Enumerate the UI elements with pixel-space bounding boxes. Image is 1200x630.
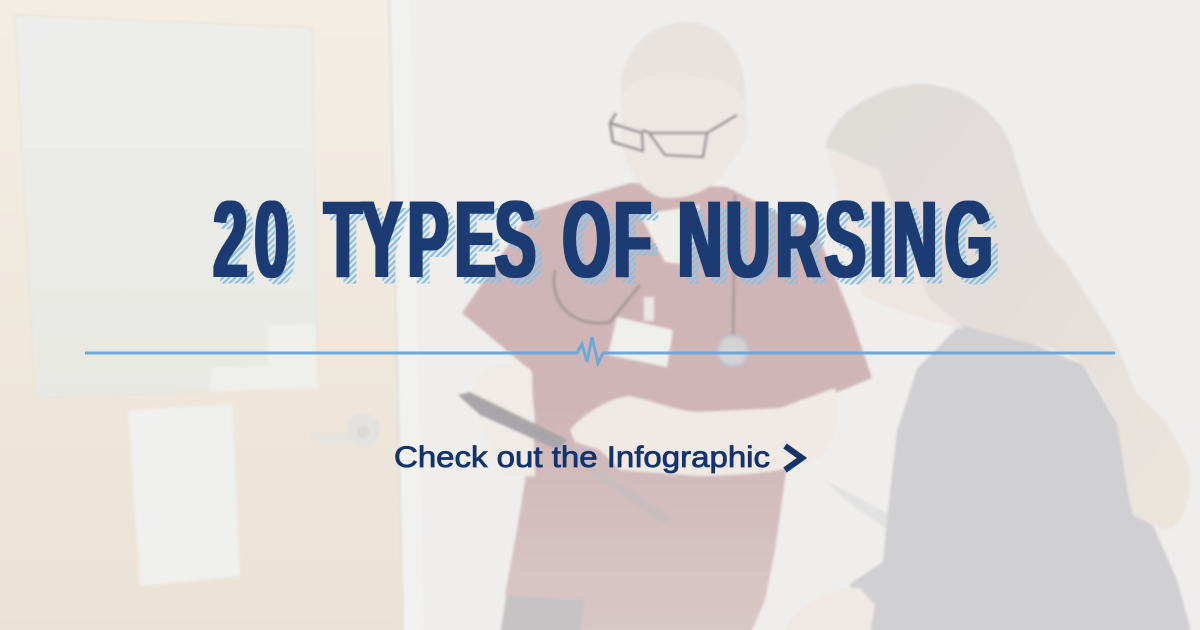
patient [785,84,1192,630]
trousers [500,585,595,630]
call to action [394,441,802,474]
door window [15,15,318,398]
face [828,150,965,330]
patient hands [785,588,875,630]
title [213,200,998,284]
link text: Check out the Infographic [394,441,770,474]
glasses [610,113,737,157]
door [0,0,424,630]
chevron arrow [785,446,802,470]
scrubs [462,183,872,630]
pillow wedge [825,480,890,530]
divider with heartbeat icon [85,337,1115,363]
right arm [570,388,838,476]
hairline [621,22,745,105]
nurse [458,22,872,630]
left arm [474,362,535,476]
tablet lower edge [540,440,672,525]
title hatched shadow [220,208,998,284]
black top [850,325,1192,630]
stethoscope [554,270,640,323]
hair [825,84,1191,529]
undershirt [640,205,700,265]
title main text: 20 TYPES OF NURSING [213,177,993,300]
head [621,22,748,198]
tablet [458,392,568,450]
door handle [310,413,380,447]
name badge [608,317,673,367]
paper notice [128,405,240,586]
